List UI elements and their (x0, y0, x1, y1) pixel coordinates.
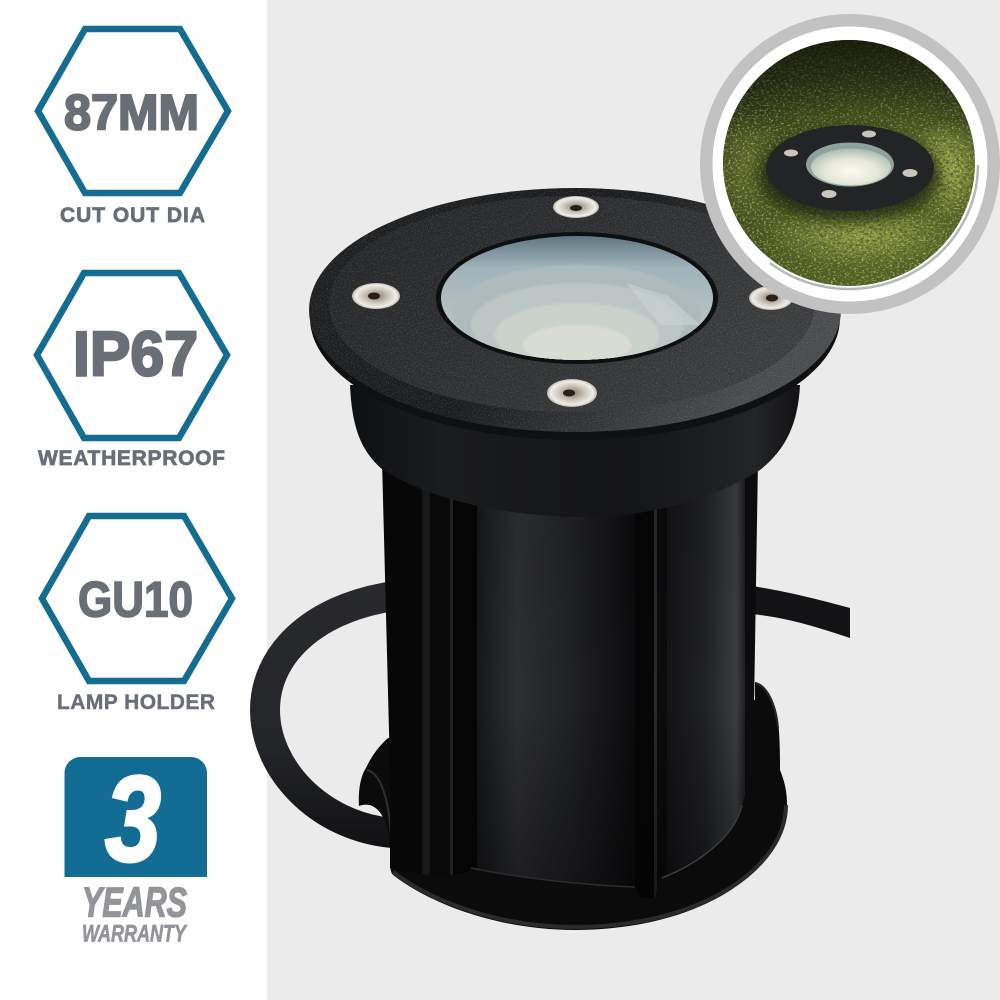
flange: top face (309, 188, 841, 432)
badge: IP67 weatherproof: IP67 (73, 320, 198, 390)
badge: 3 years warranty (64, 751, 207, 948)
inset: glowing lens (806, 142, 894, 186)
inset: screws (784, 130, 918, 198)
badge: IP67 weatherproof (37, 273, 227, 470)
inset: grey outer ring (700, 14, 1000, 314)
inset: fitting flange (766, 125, 934, 211)
badge: GU10 lamp holder: LAMP HOLDER (57, 691, 215, 714)
lens: glass window (436, 232, 718, 367)
badge: 87mm cut out diameter (38, 29, 228, 227)
badge: GU10 lamp holder: GU10 (78, 572, 193, 628)
base plate (359, 682, 787, 930)
panel: grey product background (267, 0, 1000, 1000)
badge: 87mm cut out diameter: 87MM (64, 84, 199, 140)
badge: 87mm cut out diameter: CUT OUT DIA (60, 204, 205, 227)
inset: thin grey arc (770, 165, 978, 289)
badge: 3 years warranty: 3 (105, 751, 161, 887)
screw: left (352, 283, 400, 309)
inset: grass photo (723, 40, 975, 286)
inset: lit fitting in grass (700, 14, 1000, 314)
badge: IP67 weatherproof: WEATHERPROOF (38, 447, 225, 470)
flange: outer edge (310, 196, 840, 440)
inset: white inner ring (712, 26, 988, 302)
badge: 3 years warranty: WARRANTY (82, 920, 187, 948)
badge: 3 years warranty: YEARS (82, 878, 187, 926)
cable: left loop (265, 597, 392, 833)
badge: GU10 lamp holder (42, 516, 232, 714)
product: ground light fitting (265, 188, 850, 930)
cable: right exit (752, 586, 850, 638)
body: base edge highlights (471, 805, 742, 887)
screw: top (553, 196, 599, 218)
screw: right (749, 286, 793, 310)
screw: bottom (547, 379, 597, 407)
collar under the flange (350, 385, 800, 517)
body: cylinder with fins (380, 460, 759, 900)
